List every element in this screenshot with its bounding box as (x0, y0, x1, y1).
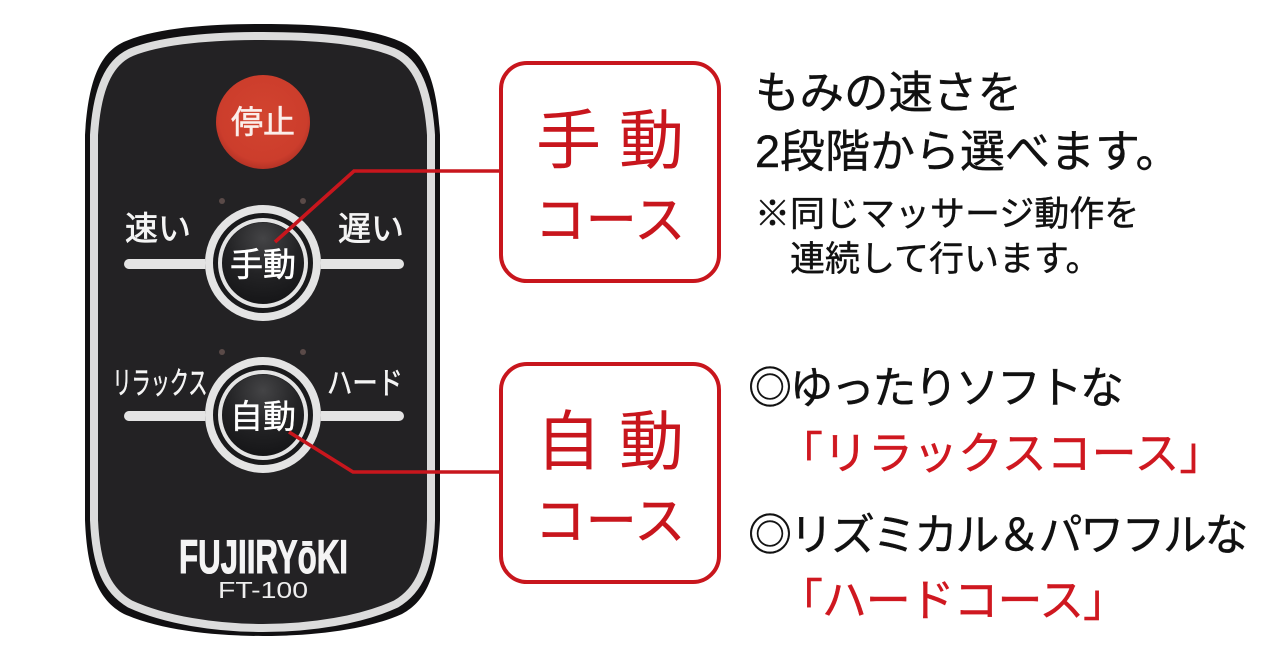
text: hard course (748, 511, 1246, 626)
speed labels: 速い (125, 210, 191, 247)
brand logo: FUJIIRYōKI (179, 530, 348, 583)
automatic slider line (129, 411, 399, 421)
course labels: リラックス (112, 366, 208, 401)
stop button (216, 75, 310, 169)
callout: automatic course: 自 動 (536, 405, 684, 478)
callout: manual course (501, 63, 719, 281)
remote control (85, 24, 440, 636)
text: manual description (755, 69, 1181, 279)
text: relax course: 「リラックスコース」 (778, 428, 1224, 479)
text: manual description: ※同じマッサージ動作を (755, 195, 1139, 234)
callout: automatic course (501, 364, 719, 582)
text: hard course: ◎リズミカル＆パワフルな (748, 511, 1246, 560)
connector: automatic (289, 432, 500, 472)
callout: automatic course: コース (535, 493, 685, 550)
text: relax course: ◎ゆったりソフトな (748, 364, 1122, 413)
connector: manual (275, 171, 500, 242)
callout: manual course: コース (535, 192, 685, 249)
automatic button: 自動 (230, 398, 296, 435)
text: hard course: 「ハードコース」 (778, 575, 1127, 626)
course labels (112, 366, 403, 401)
manual button: 手動 (230, 246, 296, 283)
text: relax course (748, 364, 1224, 479)
text: manual description: もみの速さを (755, 69, 1022, 118)
remote silver border (94, 36, 431, 628)
stop button: 停止 (231, 104, 295, 140)
model number: FT-100 (218, 577, 308, 603)
text: manual description: 連続して行います。 (790, 240, 1100, 279)
course labels: ハード (327, 366, 403, 401)
text: manual description: 2段階から選べます。 (755, 126, 1181, 177)
indicator lamps (219, 198, 306, 355)
remote body (85, 24, 440, 636)
speed labels (125, 210, 404, 247)
automatic button (205, 357, 321, 473)
manual button (205, 205, 321, 321)
speed labels: 遅い (338, 210, 404, 247)
manual slider line (129, 259, 399, 269)
callout: manual course: 手 動 (536, 104, 684, 177)
